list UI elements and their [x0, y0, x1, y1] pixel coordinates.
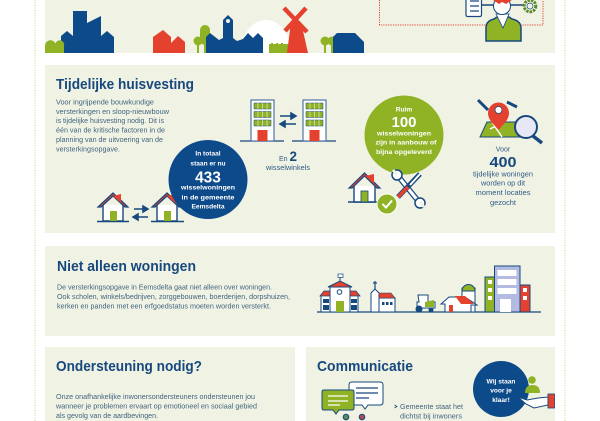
callout: 100 circle: 100 — [391, 114, 417, 131]
text: Voor 400 tijdelijke woningen: moment locaties — [476, 190, 531, 197]
body text — [55, 394, 257, 420]
text: Gemeente staat het dichtst bij inwoners: Gemeente staat het — [400, 404, 463, 411]
callout: Wij staan voor je klaar: voor je — [490, 388, 512, 394]
intro text: één van de kritische factoren in de — [56, 128, 165, 134]
intro text: planning van de uitvoering van de — [56, 137, 163, 144]
intro text: versterkingsopgave. — [56, 146, 120, 154]
callout: Wij staan voor je klaar — [473, 361, 529, 417]
heading: Niet alleen woningen — [57, 259, 196, 275]
icon: map pin with magnifier — [478, 100, 542, 143]
callout: 100 circle: zijn in aanbouw of — [376, 140, 437, 146]
callout: dotted box — [380, 0, 543, 25]
callout: 433 circle: 433 — [195, 170, 221, 186]
callout: 100 circle: Ruim — [396, 106, 412, 114]
text: Gemeente staat het dichtst bij inwoners — [394, 404, 463, 420]
label: En 2 wisselwinkels: wisselwinkels — [265, 165, 311, 172]
body text: wanneer je problemen ervaart op emotioneel en sociaal gebied — [55, 404, 257, 410]
panel: Tijdelijke huisvesting — [45, 65, 555, 233]
callout: 100 circle — [364, 96, 444, 174]
intro text: is tijdelijke huisvesting nodig. Dit is — [56, 118, 164, 125]
callout: 100 circle: bijna opgeleverd — [376, 149, 432, 156]
panel: Ondersteuning nodig? — [45, 347, 295, 421]
icon: person with checklist and gear — [466, 0, 536, 41]
icon: green, lilac and red tower block — [485, 266, 530, 312]
text: Voor 400 tijdelijke woningen: worden op dit — [480, 180, 525, 188]
body text: Ook scholen, winkels/bedrijven, zorggebouwen, boerderijen, dorpshuizen, — [57, 294, 290, 301]
skyline: blue church — [206, 15, 263, 53]
icon: two office buildings with arrows — [240, 100, 336, 141]
icon: tractor — [416, 295, 435, 312]
icon: church — [371, 281, 395, 312]
label: En 2 wisselwinkels: En 2 — [279, 149, 297, 164]
heading: Tijdelijke huisvesting — [56, 77, 194, 93]
skyline: blue building right — [333, 33, 364, 53]
panel: Communicatie — [306, 347, 555, 421]
text: Voor 400 tijdelijke woningen: Voor — [496, 146, 511, 154]
icon: farm — [441, 285, 477, 312]
intro text — [56, 100, 170, 154]
intro text: versterkingen en sloop-nieuwbouw — [56, 109, 170, 116]
skyline: green trees right — [320, 36, 336, 53]
skyline: green hedge — [269, 43, 288, 53]
callout: 433 circle: Eemsdelta — [192, 204, 225, 210]
icon: hand with person — [518, 376, 554, 408]
text: Voor 400 tijdelijke woningen — [473, 146, 533, 207]
callout: 100 circle: wisselwoningen — [376, 130, 431, 138]
text: Voor 400 tijdelijke woningen: 400 — [490, 154, 516, 171]
callout: 433 circle: wisselwoningen — [180, 184, 235, 192]
callout: Wij staan voor je klaar: Wij staan — [487, 378, 515, 386]
skyline: green bush left — [45, 40, 64, 53]
text: Voor 400 tijdelijke woningen: tijdelijke woningen — [473, 172, 533, 178]
label: En 2 wisselwinkels — [265, 149, 311, 172]
callout: Wij staan voor je klaar: klaar! — [492, 397, 510, 404]
skyline: blue factory — [61, 11, 114, 53]
text: Voor 400 tijdelijke woningen: gezocht — [490, 200, 516, 207]
heading: Communicatie — [317, 359, 413, 375]
icon: speech bubbles — [322, 382, 383, 420]
body text: kerken en panden met een erfgoedstatus moeten worden versterkt. — [57, 304, 271, 310]
callout: 433 circle: In totaal — [195, 150, 221, 158]
callout: 433 circle — [168, 140, 248, 219]
body text: De versterkingsopgave in Eemsdelta gaat niet alleen over woningen. — [57, 284, 272, 292]
body text: als gevolg van de aardbevingen. — [56, 413, 158, 420]
callout: 433 circle: in de gemeente — [182, 194, 235, 202]
body text — [57, 284, 290, 310]
text: Gemeente staat het dichtst bij inwoners: dichtst bij inwoners — [400, 414, 463, 420]
skyline: white sun — [241, 20, 291, 53]
callout: 433 circle: staan er nu — [190, 160, 226, 168]
skyline: red houses — [153, 30, 185, 53]
icon: two houses with arrows — [97, 193, 184, 222]
icon: red windmill — [284, 8, 308, 53]
panel: Niet alleen woningen — [45, 246, 555, 336]
skyline: tree — [194, 25, 210, 53]
intro text: Voor ingrijpende bouwkundige — [56, 100, 154, 106]
body text: Onze onafhankelijke inwonersondersteuners ondersteunen jou — [56, 394, 255, 401]
icon: house with tools and check — [348, 170, 425, 214]
heading: Ondersteuning nodig? — [56, 359, 202, 375]
icon: school — [320, 274, 360, 312]
icon: buildings row — [317, 266, 541, 312]
panel: top skyline — [45, 0, 555, 53]
